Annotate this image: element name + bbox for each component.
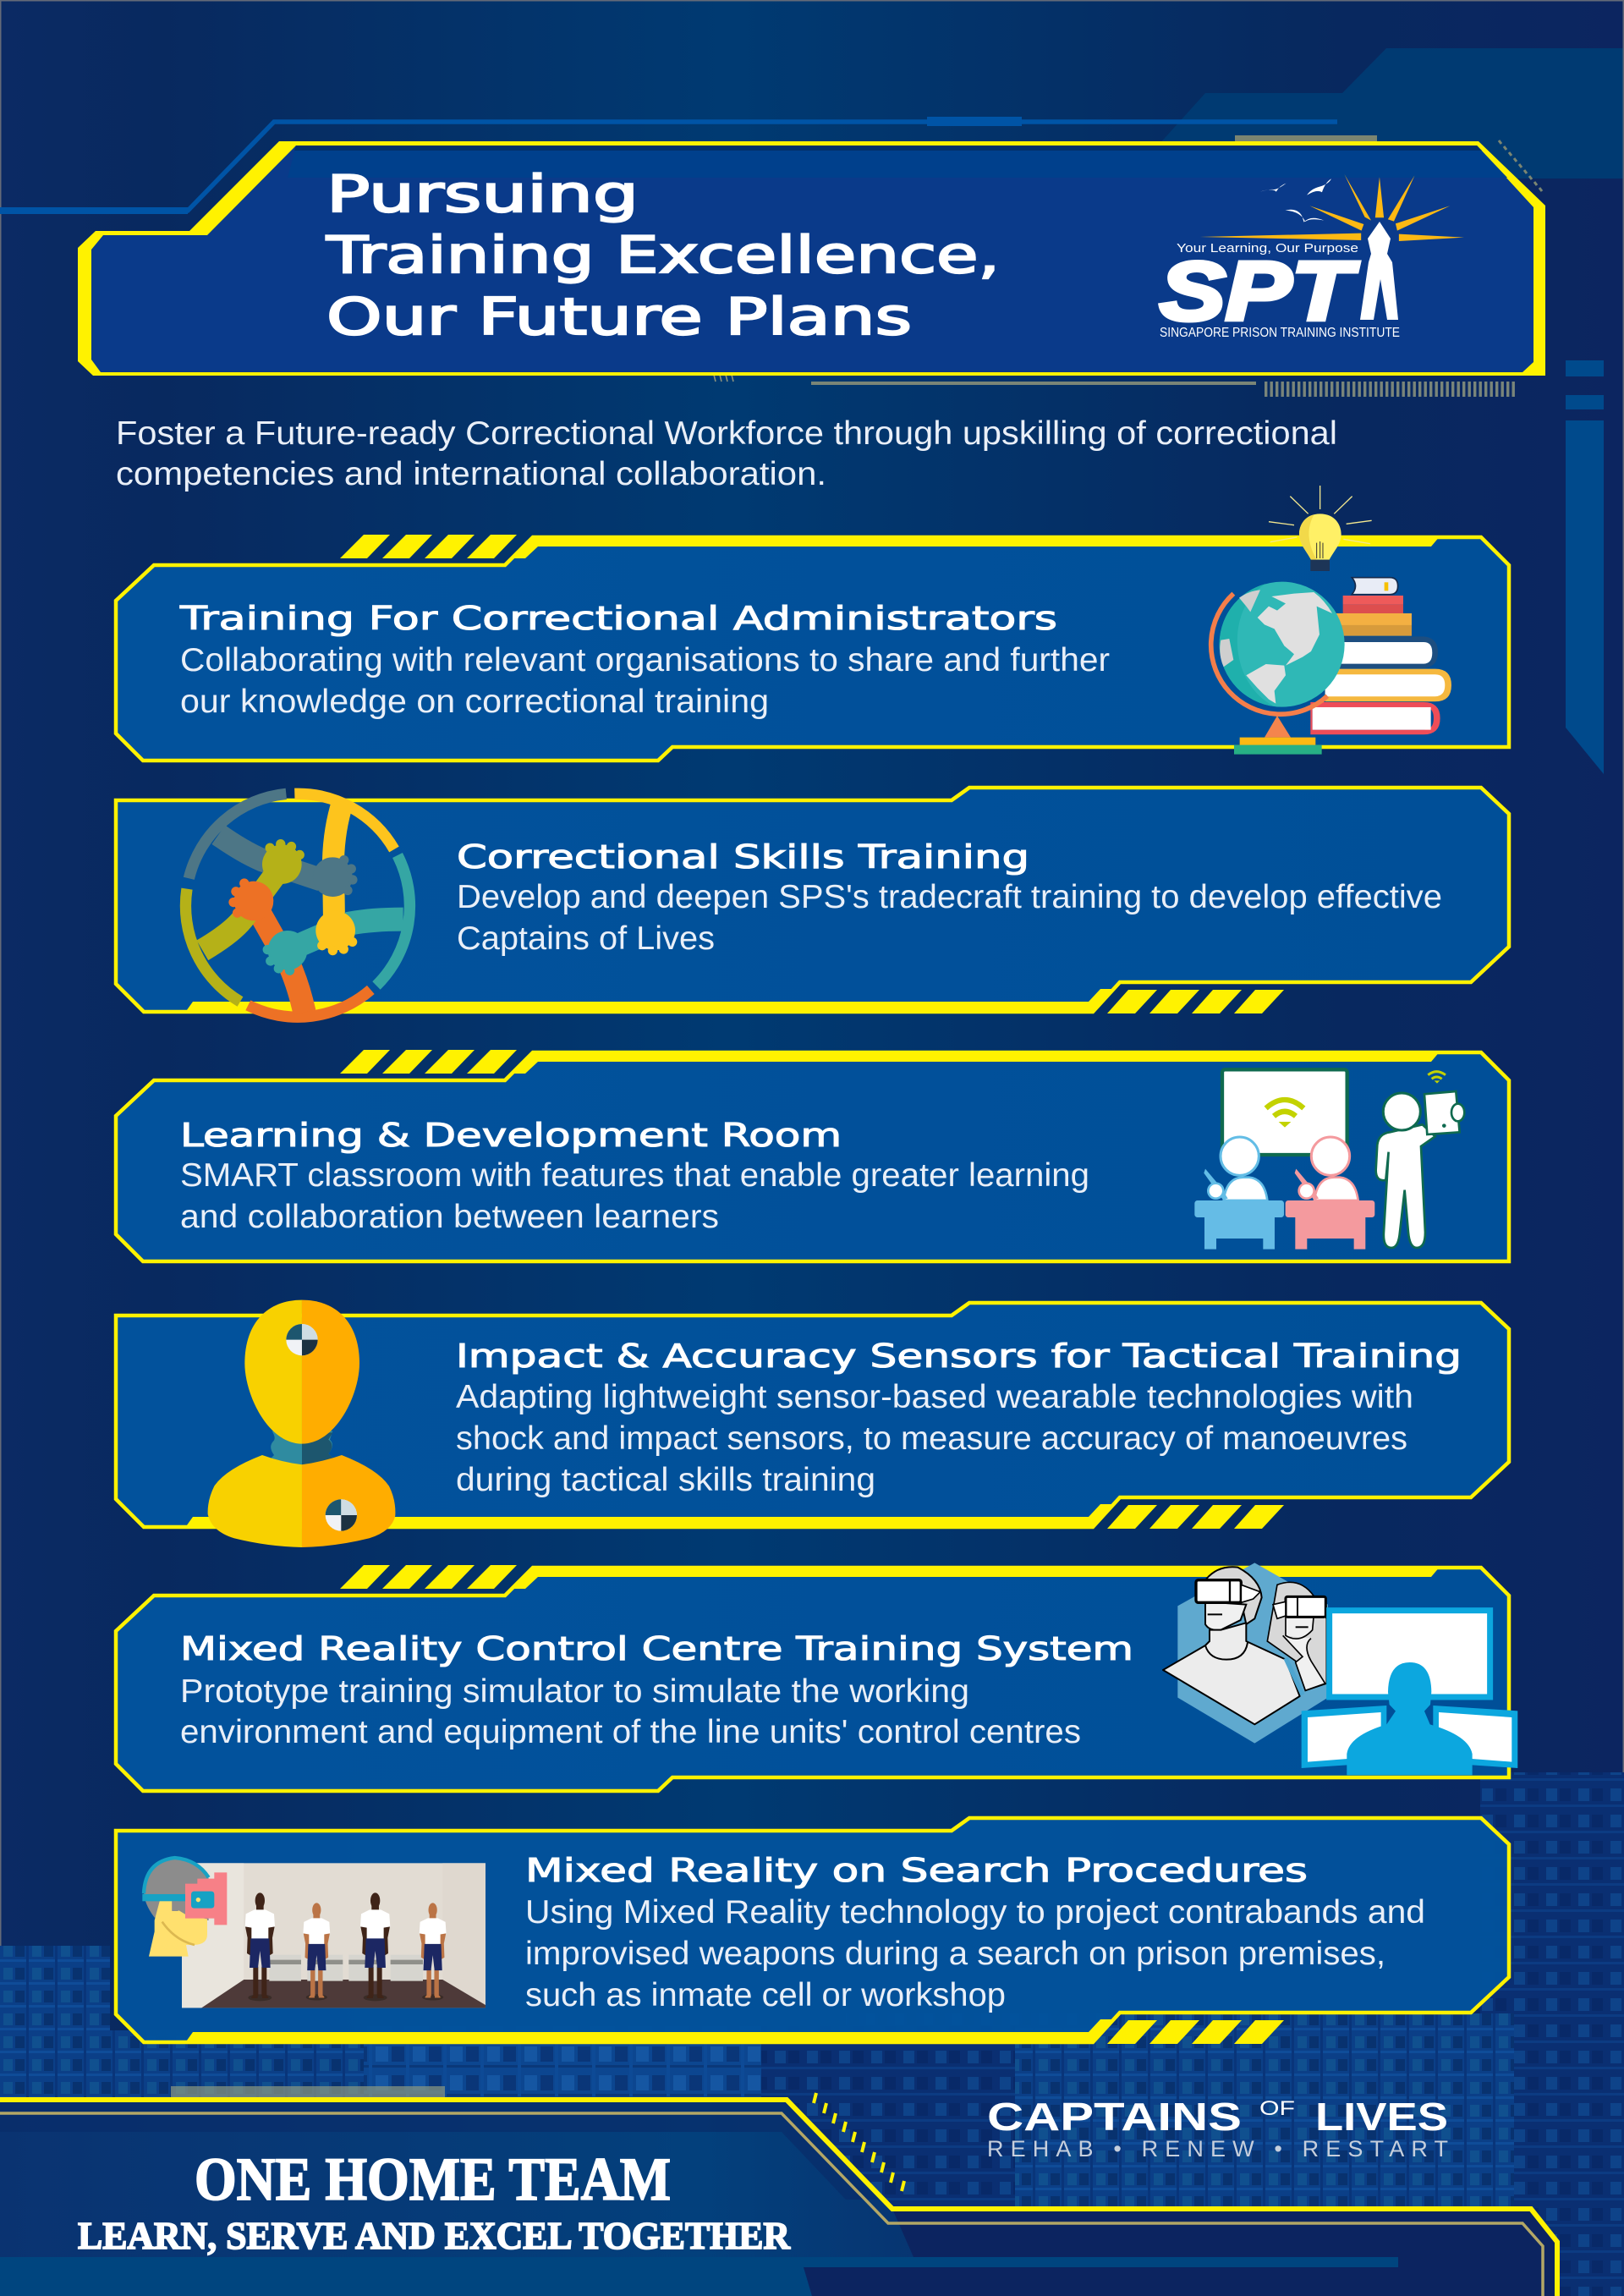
Captains of Lives logo: LIVES [1315, 2095, 1448, 2139]
description: Prototype training simulator to simulate the working [180, 1673, 969, 1710]
icon: crash test dummy [208, 1300, 395, 1547]
description [525, 1894, 1425, 2013]
heading: Impact & Accuracy Sensors for Tactical Training [456, 1338, 1462, 1375]
description: improvised weapons during a search on prison premises, [525, 1936, 1385, 1972]
diagonal yellow dashes [814, 2093, 904, 2191]
intro text: competencies and international collaboration. [116, 456, 826, 492]
decorative header lines [0, 117, 1604, 774]
icon: smart classroom [1194, 1069, 1464, 1250]
title [326, 165, 1000, 347]
Captains of Lives logo [987, 2095, 1448, 2161]
heading: Learning & Development Room [180, 1117, 842, 1154]
description: Captains of Lives [457, 920, 715, 957]
description: Using Mixed Reality technology to project contrabands and [525, 1894, 1425, 1931]
panel: Mixed Reality Control Centre Training System [116, 1563, 1517, 1791]
heading: Mixed Reality on Search Procedures [525, 1852, 1308, 1889]
panel: Training For Correctional Administrators [116, 486, 1509, 761]
slogan: ONE HOME TEAM [195, 2145, 671, 2213]
description: Collaborating with relevant organisations to share and further [180, 642, 1110, 678]
description: environment and equipment of the line units' control centres [180, 1714, 1081, 1750]
title: Pursuing [326, 165, 639, 224]
panel: Mixed Reality on Search Procedures [116, 1818, 1509, 2044]
logo: SPTI [1160, 174, 1464, 340]
Captains of Lives logo: REHAB • RENEW • RESTART [987, 2136, 1448, 2161]
intro text: Foster a Future-ready Correctional Workforce through upskilling of correctional [116, 415, 1337, 452]
lighthouse tower [1360, 222, 1398, 320]
description: SMART classroom with features that enable greater learning [180, 1157, 1089, 1194]
icon: ring of joined hands [185, 794, 409, 1017]
icon: globe, books and light bulb [1211, 486, 1451, 755]
description [180, 1673, 1081, 1750]
simulation room [182, 1863, 486, 2008]
simulated search room with figures and headset icon [142, 1858, 486, 2008]
slogan [78, 2145, 791, 2257]
title: Our Future Plans [326, 288, 912, 347]
description: shock and impact sensors, to measure accuracy of manoeuvres [456, 1420, 1407, 1457]
heading: Correctional Skills Training [457, 838, 1029, 876]
Captains of Lives logo: CAPTAINS [987, 2095, 1242, 2139]
Captains of Lives logo: OF [1259, 2097, 1295, 2120]
description: and collaboration between learners [180, 1199, 719, 1235]
panel: Learning & Development Room [116, 1050, 1509, 1261]
description: Develop and deepen SPS's tradecraft training to develop effective [457, 879, 1442, 915]
title: Training Excellence, [326, 226, 1000, 285]
description [180, 1157, 1089, 1235]
description: such as inmate cell or workshop [525, 1977, 1006, 2013]
icon: mixed reality headset users and monitors [1163, 1563, 1517, 1775]
description: during tactical skills training [456, 1462, 875, 1498]
heading: Mixed Reality Control Centre Training System [180, 1630, 1133, 1667]
panel: Correctional Skills Training [116, 788, 1509, 1017]
lighthouse rays [1200, 174, 1464, 241]
icon: VR headset head [142, 1858, 227, 1957]
footer band [0, 2086, 1559, 2296]
header panel [78, 141, 1545, 376]
logo: SPTI: SPT [1160, 244, 1358, 338]
description [456, 1379, 1413, 1498]
panel: Impact & Accuracy Sensors for Tactical Training [116, 1300, 1509, 1547]
description: Adapting lightweight sensor-based wearable technologies with [456, 1379, 1413, 1415]
slogan: LEARN, SERVE AND EXCEL TOGETHER [78, 2214, 791, 2257]
description [457, 879, 1442, 957]
description [180, 642, 1110, 720]
logo: SPTI: SINGAPORE PRISON TRAINING INSTITUTE [1160, 326, 1400, 340]
intro text [116, 415, 1337, 492]
heading: Training For Correctional Administrators [179, 600, 1057, 637]
city buildings backdrop [0, 1772, 1624, 2296]
logo: SPTI: Your Learning, Our Purpose [1177, 241, 1358, 255]
description: our knowledge on correctional training [180, 684, 769, 720]
